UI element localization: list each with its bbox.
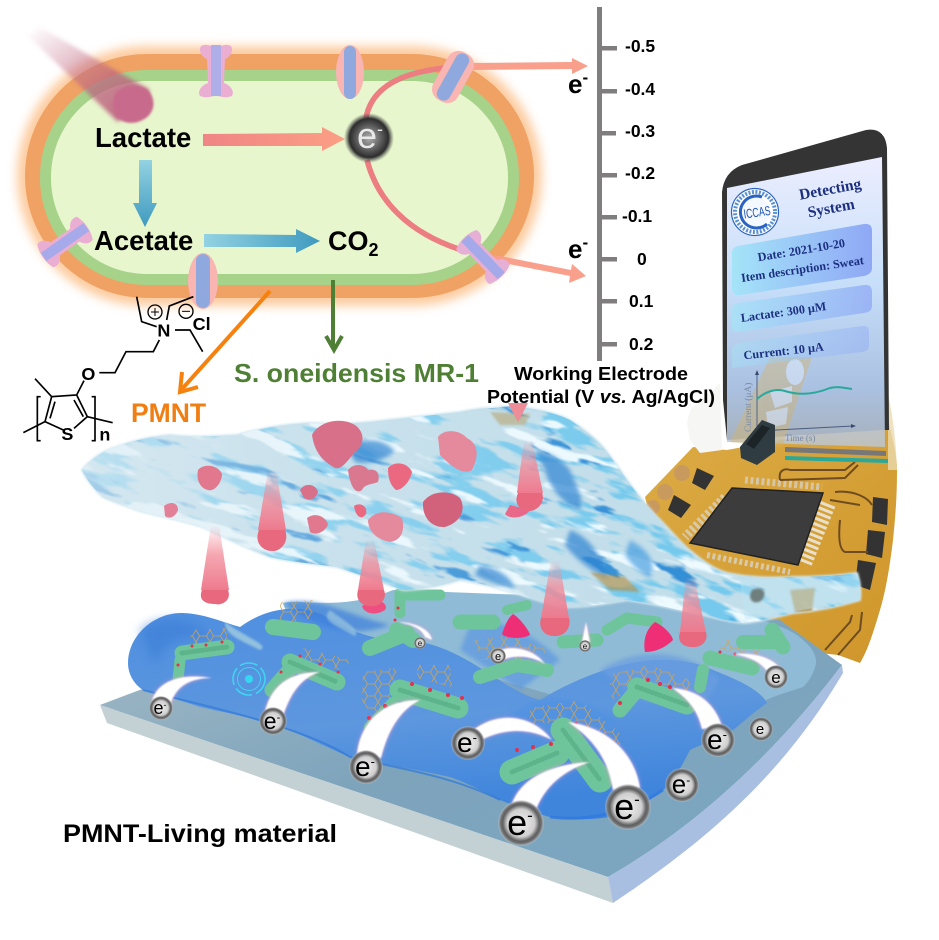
electrons on material: - bbox=[686, 773, 690, 787]
rod left low bbox=[201, 525, 229, 590]
heading: System bbox=[806, 196, 856, 221]
hot pink cone left bbox=[502, 614, 530, 638]
electron potential axis: 0.1 bbox=[629, 291, 654, 311]
electrons on material: e bbox=[457, 727, 473, 758]
bacteria bbox=[178, 593, 783, 780]
electrons on material: - bbox=[164, 700, 167, 710]
label: electron upper: - bbox=[582, 68, 588, 87]
card text: Lactate: 300 μM bbox=[740, 299, 828, 325]
label: S. oneidensis MR-1: S. oneidensis MR-1 bbox=[234, 358, 479, 388]
electrons on material: - bbox=[634, 790, 640, 809]
PMNT molecule: S bbox=[61, 424, 73, 444]
electrons on material: e bbox=[418, 639, 423, 648]
white connector bbox=[687, 383, 722, 453]
electrons on material: e bbox=[707, 724, 723, 755]
PMNT molecule: N bbox=[157, 321, 170, 341]
label: Lactate: Lactate bbox=[95, 122, 191, 153]
cell outer membrane bbox=[17, 46, 542, 306]
rod lower center bbox=[541, 560, 569, 618]
hot pink cone right bbox=[644, 622, 673, 652]
electrons on material: e bbox=[153, 698, 164, 718]
electron potential axis: -0.1 bbox=[622, 206, 652, 226]
membrane protein: upper right bbox=[428, 47, 478, 107]
electrons on material: - bbox=[527, 806, 533, 825]
card text: Item description: Sweat bbox=[740, 253, 865, 285]
label: working electrode potential: Working Electrode bbox=[514, 363, 688, 384]
bacterial red dots bbox=[176, 606, 736, 752]
pcb seen through screen bbox=[730, 357, 812, 447]
membrane protein: bottom bbox=[188, 253, 218, 309]
black connector bbox=[740, 420, 775, 465]
pink lactate rods bbox=[201, 403, 707, 652]
phone body bbox=[722, 130, 889, 440]
arrow: to S. oneidensis bbox=[326, 280, 342, 350]
label: CO2: CO bbox=[328, 226, 368, 256]
chip pins bbox=[685, 480, 826, 572]
electrons on material: e bbox=[672, 769, 686, 799]
rod middle bbox=[358, 540, 384, 590]
arrow: lactate to acetate bbox=[133, 160, 157, 227]
electrons on material: e bbox=[614, 786, 634, 827]
bacteria bodies bbox=[178, 593, 783, 780]
membrane protein: left bbox=[35, 215, 96, 269]
electrons on material: - bbox=[473, 730, 477, 745]
electrons on material: e bbox=[583, 642, 588, 651]
electron potential axis: 0.2 bbox=[629, 334, 654, 354]
electron potential axis bbox=[597, 7, 655, 361]
heading: Detecting bbox=[798, 175, 863, 204]
heading bbox=[798, 175, 863, 221]
electrons on material bbox=[149, 637, 788, 846]
sweat gel bbox=[80, 404, 863, 625]
electron transfer wires bbox=[366, 68, 468, 252]
gel tip highlights bbox=[740, 575, 860, 620]
membrane protein: top blue bbox=[336, 45, 364, 99]
chip bbox=[690, 488, 823, 565]
gel golden reflections bbox=[490, 412, 815, 612]
hydrogel pillows bbox=[128, 590, 816, 819]
card text: Current: 10 μA bbox=[743, 340, 825, 362]
electron in cell: - bbox=[377, 119, 383, 139]
PMNT molecule: Cl bbox=[193, 314, 211, 334]
electron potential axis: -0.5 bbox=[625, 36, 655, 56]
label: electron upper: e bbox=[568, 69, 582, 99]
rod lower right bbox=[680, 577, 706, 632]
rod left high bbox=[258, 470, 286, 530]
bacterial cell bbox=[17, 46, 542, 306]
label: CO2: 2 bbox=[368, 240, 379, 260]
electrons on material: - bbox=[723, 727, 727, 742]
label: PMNT: PMNT bbox=[131, 398, 206, 428]
electron potential axis: -0.2 bbox=[625, 163, 655, 183]
PMNT molecule: O bbox=[81, 364, 95, 384]
gel blue streaks bbox=[345, 440, 652, 588]
arrow: to PMNT bbox=[180, 291, 270, 392]
traces bbox=[780, 462, 872, 655]
gel pale left zone bbox=[82, 406, 570, 590]
info card: date bbox=[732, 224, 872, 295]
target icon bbox=[233, 663, 265, 695]
mini chart bbox=[755, 370, 856, 431]
electrons on material: - bbox=[371, 754, 375, 769]
smartphone bbox=[722, 130, 889, 463]
back pillows bbox=[283, 590, 816, 730]
ICCAS logo: ICCAS bbox=[743, 203, 772, 222]
label: Acetate: Acetate bbox=[94, 225, 193, 256]
rod upper right bbox=[517, 440, 543, 493]
electron in cell: e bbox=[357, 115, 377, 156]
cone at label bbox=[508, 403, 528, 422]
flexible circuit board bbox=[645, 395, 897, 663]
surface components bbox=[668, 468, 888, 590]
arrow: lactate to electron bbox=[203, 127, 345, 151]
label: working electrode potential: Potential (V vs. Ag/AgCl) bbox=[487, 386, 715, 407]
membrane protein: top pink bbox=[199, 45, 233, 97]
label: electron lower: - bbox=[582, 233, 588, 252]
electron potential axis: -0.3 bbox=[625, 121, 655, 141]
electrons on material: e bbox=[771, 668, 781, 687]
electron in cell bbox=[344, 113, 394, 163]
electrons on material: e bbox=[507, 802, 527, 843]
smartphone: Current (μA) bbox=[743, 383, 754, 432]
electrons on material: e bbox=[495, 651, 501, 663]
bacteria texture bbox=[182, 647, 687, 780]
ICCAS logo bbox=[732, 188, 778, 236]
electron glow trails bbox=[152, 622, 780, 812]
electron potential axis: 0 bbox=[637, 249, 647, 269]
smartphone: Time (s) bbox=[785, 433, 815, 443]
PMNT molecule: n bbox=[99, 425, 110, 445]
card text bbox=[740, 236, 865, 362]
info card: lactate bbox=[732, 285, 872, 332]
electrons on material: e bbox=[355, 751, 371, 782]
PMNT molecule bbox=[23, 297, 211, 445]
pink lactate on gel bbox=[164, 421, 477, 542]
lactate rod bbox=[28, 27, 153, 123]
substrate plate bbox=[100, 600, 843, 903]
electrons on material: - bbox=[277, 712, 281, 724]
label: working electrode potential bbox=[487, 363, 715, 407]
electron potential axis: -0.4 bbox=[625, 79, 655, 99]
info card: current bbox=[732, 326, 869, 368]
arrow: acetate to CO2 bbox=[204, 229, 320, 253]
card text: Date: 2021-10-20 bbox=[757, 236, 846, 264]
label: PMNT-Living material: PMNT-Living material bbox=[63, 820, 337, 848]
electrons on material: e bbox=[756, 721, 764, 738]
membrane protein: lower right bbox=[454, 227, 512, 287]
electrons on material: e bbox=[264, 708, 277, 734]
label: electron lower: e bbox=[568, 234, 582, 264]
electron output arrows bbox=[470, 58, 588, 283]
capacitors bbox=[646, 465, 690, 514]
polymer networks bbox=[190, 600, 760, 745]
